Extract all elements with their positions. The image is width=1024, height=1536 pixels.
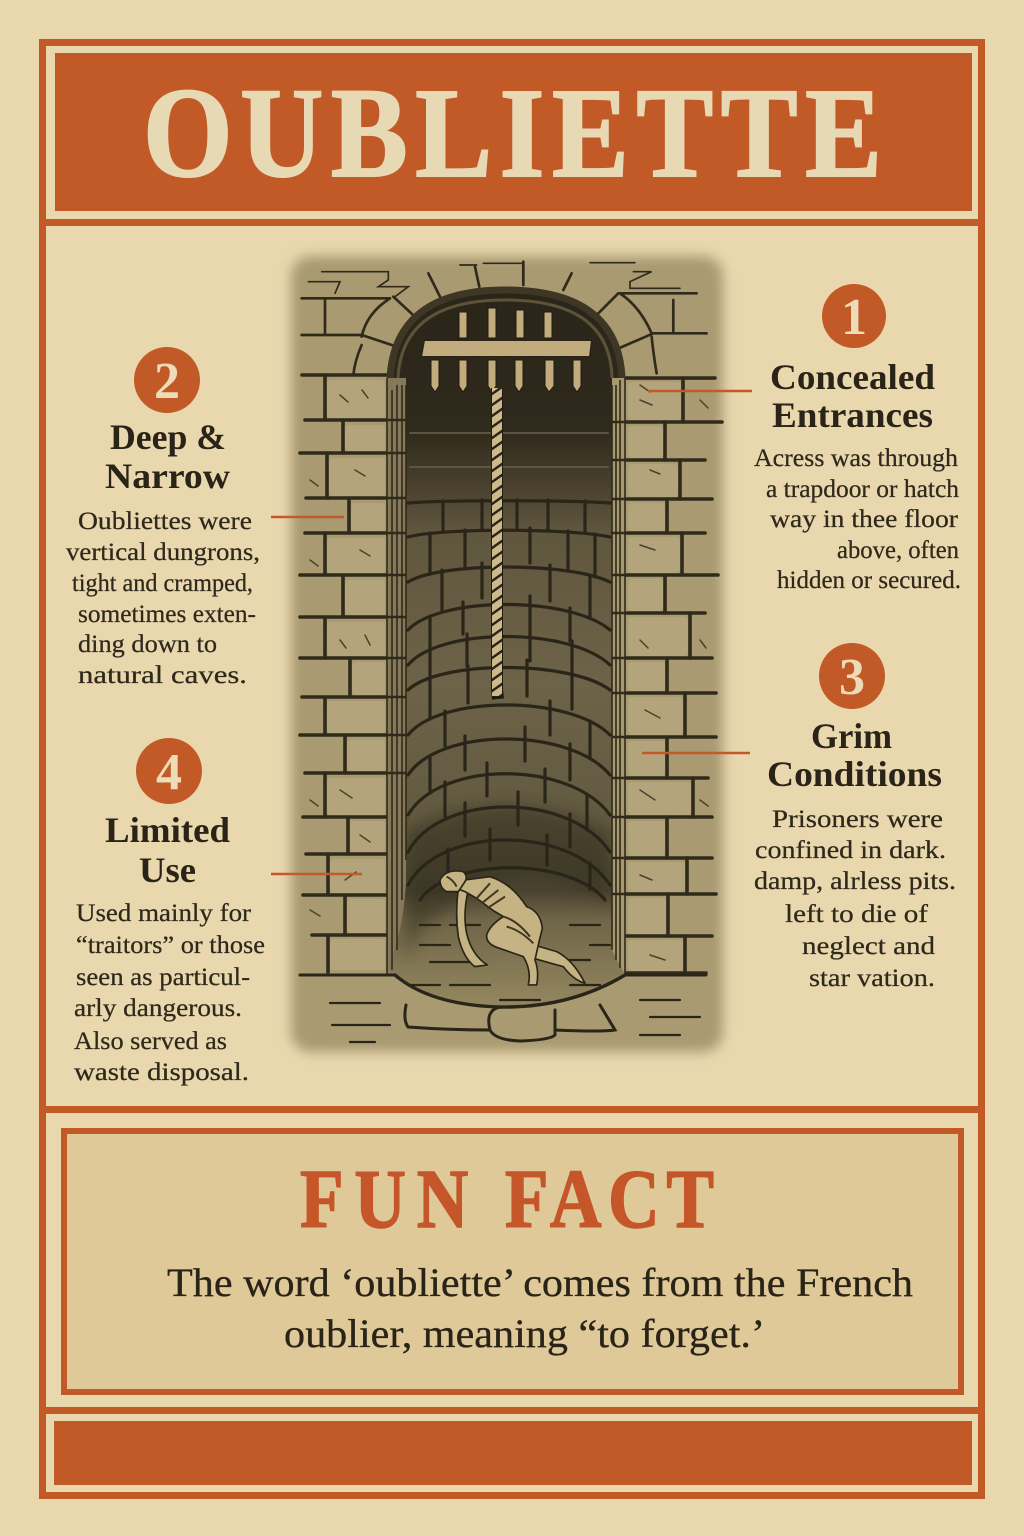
heading 3 [767,716,942,794]
body 1 [754,445,961,594]
body 1: above, often [837,537,959,564]
shaft interior [387,287,625,1006]
callout 2: deep and narrow [66,347,260,689]
heading 1: Entrances [772,395,933,435]
number badge 2 [134,347,200,413]
arch surround voussoirs [302,262,713,378]
arm [457,888,487,967]
lower grate spikes [431,360,581,392]
body 4 [74,900,265,1086]
torso and thigh [457,877,542,985]
callout 3: grim conditions [754,643,956,992]
wooden beam [421,340,592,357]
number badge 4: 4 [156,744,182,801]
leader lines [271,391,752,874]
body 3: Prisoners were [772,806,943,833]
body 4: Used mainly for [76,900,252,927]
heading 1 [770,357,935,435]
body 2: Oubliettes were [78,508,252,535]
body 3: left to die of [785,901,929,928]
fun fact heading [300,1153,714,1245]
body 2: sometimes exten- [78,601,256,628]
callout 4: limited use [74,738,265,1086]
body 2 [66,508,260,689]
body 2: tight and cramped, [72,570,253,597]
body 2: vertical dungrons, [66,539,260,566]
fun fact text: The word ‘oubliette’ comes from the French [167,1260,913,1305]
rear leg [528,943,585,983]
heading 3: Grim [811,716,892,756]
heading 3: Conditions [767,754,942,794]
left and right jambs [387,378,406,972]
illustration: oubliette shaft [291,256,723,1052]
head [440,871,466,892]
body 3: damp, alrless pits. [754,868,956,895]
title: OUBLIETTE [143,62,882,204]
body 1: way in thee floor [770,506,959,533]
floor [300,925,706,1042]
body 4: “traitors” or those [76,932,265,959]
alcove shadow [406,805,610,960]
body 1: Acress was through [754,445,959,472]
number badge 1 [822,284,886,348]
panel: fun fact [64,1131,961,1392]
mortar lines [300,375,722,973]
fun fact heading: FACT [505,1153,714,1245]
arch rim [390,290,622,378]
stone scratches [310,385,708,960]
heading 2: Deep & [110,417,226,457]
rope [492,388,502,699]
number badge 1: 1 [841,289,867,346]
heading 4: Limited [105,810,230,850]
heading 4: Use [139,850,196,890]
prisoner figure [440,871,585,985]
number badge 2: 2 [154,353,180,410]
heading 2 [105,417,230,496]
body 4: waste disposal. [74,1059,249,1086]
body 3: confined in dark. [755,837,946,864]
fun fact text [167,1260,913,1356]
wall stones [327,380,691,971]
body 3 [754,806,956,992]
number badge 4 [136,738,202,804]
upper grate bars [459,308,552,338]
body 1: hidden or secured. [777,567,961,594]
fun fact text: oublier, meaning “to forget.’ [284,1311,765,1356]
heading 2: Narrow [105,456,230,496]
callout 1: concealed entrances [754,284,961,594]
heading 4 [105,810,230,890]
title banner [55,53,972,211]
number badge 3 [819,643,885,709]
fun fact heading: FUN [300,1153,468,1245]
bottom banner [54,1421,972,1485]
heading 1: Concealed [770,357,935,397]
stone wall backdrop [291,256,723,1052]
inner curved stone courses [408,433,610,900]
body 4: seen as particul- [76,964,250,991]
body 4: Also served as [74,1028,227,1055]
body 2: ding down to [78,631,217,658]
number badge 3: 3 [839,649,865,706]
body 2: natural caves. [78,662,247,689]
body 1: a trapdoor or hatch [766,476,959,503]
body 3: neglect and [802,933,936,960]
body 4: arly dangerous. [74,995,242,1022]
body 3: star vation. [809,965,935,992]
